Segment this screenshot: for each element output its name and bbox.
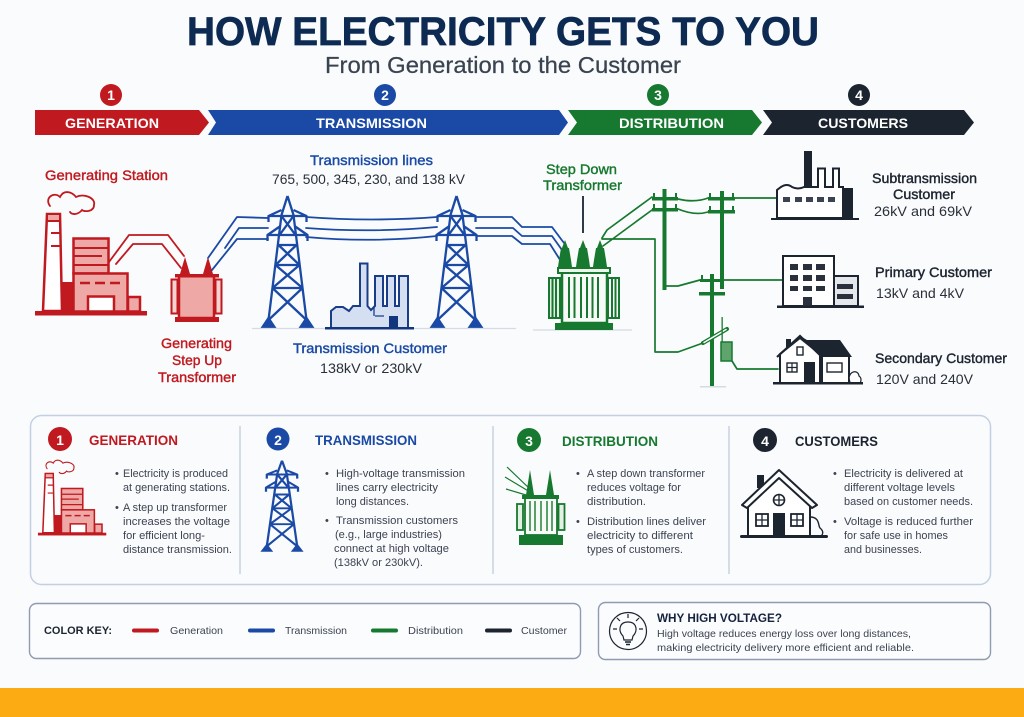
icon: small transformer	[505, 467, 564, 545]
column: customers	[740, 428, 973, 556]
distribution bullets: •	[576, 468, 580, 480]
key: generation: Generation	[170, 625, 223, 637]
step 4 chevron: customers	[763, 84, 974, 135]
column: generation: GENERATION	[89, 432, 178, 448]
label: subtransmission customer: Subtransmission	[872, 170, 977, 186]
distribution bullets: types of customers.	[587, 544, 683, 556]
distribution bullets: electricity to different	[587, 530, 693, 542]
generation bullets: •	[115, 468, 119, 480]
step 4 chevron: customers: CUSTOMERS	[818, 115, 908, 131]
green distribution wires	[602, 197, 783, 369]
icon: small tower	[260, 461, 304, 552]
generation bullets	[115, 468, 232, 556]
label: generating step up transformer	[158, 335, 236, 385]
step 2 chevron: transmission: TRANSMISSION	[316, 115, 427, 131]
icon: small house	[740, 470, 828, 538]
key: distribution: Distribution	[408, 625, 463, 637]
distribution bullets: A step down transformer	[587, 468, 705, 480]
customers bullets: •	[833, 516, 837, 528]
step 2 chevron: transmission: 2	[381, 87, 389, 103]
customers bullets: Electricity is delivered at	[844, 468, 963, 480]
distribution bullets: •	[576, 516, 580, 528]
label: generating step up transformer: Transformer	[158, 369, 236, 385]
generation bullets: for efficient long-	[123, 530, 205, 542]
icon: light bulb	[610, 612, 646, 650]
label: primary customer: 13kV and 4kV	[876, 285, 965, 301]
column: customers: 4	[761, 433, 769, 449]
panel: color key	[30, 604, 580, 658]
label: primary customer	[875, 264, 992, 301]
customers bullets: different voltage levels	[844, 482, 955, 494]
icon: subtransmission customer factory	[771, 151, 859, 220]
transmission bullets: •	[325, 468, 329, 480]
panel: why high voltage: WHY HIGH VOLTAGE?	[657, 613, 782, 625]
panel: why high voltage: making electricity delivery more efficient and reliable.	[657, 642, 914, 654]
label: generating step up transformer: Step Up	[172, 352, 222, 368]
label: transmission lines: Transmission lines	[310, 152, 433, 168]
transmission bullets: connect at high voltage	[334, 543, 449, 555]
process banner	[35, 84, 974, 135]
red wires to step up transformer	[109, 235, 184, 268]
column: distribution: DISTRIBUTION	[562, 433, 658, 449]
transmission bullets: (e.g., large industries)	[335, 529, 442, 541]
icon: utility poles	[652, 189, 735, 388]
icon: transmission tower 2	[430, 196, 484, 328]
transmission bullets: •	[325, 515, 329, 527]
icon: transmission tower 1	[260, 196, 314, 328]
label: transmission lines: 765, 500, 345, 230, and 138 kV	[272, 171, 466, 187]
transmission bullets: long distances.	[336, 496, 409, 508]
column: distribution	[505, 428, 706, 556]
key: transmission: Transmission	[285, 625, 347, 637]
customers bullets: based on customer needs.	[844, 496, 973, 508]
panel: color key: COLOR KEY:	[44, 625, 112, 637]
customers bullets: for safe use in homes	[844, 530, 948, 542]
icon: small factory	[38, 460, 106, 535]
blue transmission wires	[208, 217, 564, 270]
step 4 chevron: customers: 4	[855, 87, 863, 103]
customers bullets: Voltage is reduced further	[844, 516, 973, 528]
generation bullets: Electricity is produced	[123, 468, 228, 480]
label: step down transformer	[543, 161, 622, 193]
generation bullets: increases the voltage	[123, 516, 230, 528]
transmission bullets: (138kV or 230kV).	[334, 557, 423, 569]
ground line	[252, 328, 632, 330]
customers bullets: and businesses.	[844, 544, 922, 556]
icon: primary customer building	[777, 256, 864, 308]
label: generating step up transformer: Generating	[161, 335, 232, 351]
step 2 chevron: transmission	[208, 84, 568, 135]
label: secondary customer: 120V and 240V	[876, 371, 974, 387]
generation bullets: •	[115, 502, 119, 514]
panel: why high voltage	[598, 602, 990, 660]
step 1 chevron: generation: 1	[107, 87, 115, 103]
key: customer: Customer	[521, 625, 568, 637]
transmission bullets: Transmission customers	[336, 515, 459, 527]
column: generation: 1	[56, 432, 64, 448]
label: transmission customer: Transmission Customer	[293, 340, 447, 356]
transmission bullets	[325, 468, 465, 569]
label: step down transformer: Transformer	[543, 177, 622, 193]
step 3 chevron: distribution	[568, 84, 762, 135]
column: transmission: TRANSMISSION	[315, 432, 417, 448]
distribution bullets: distribution.	[587, 496, 646, 508]
step 1 chevron: generation	[35, 84, 209, 135]
column: customers: CUSTOMERS	[795, 433, 878, 449]
key: customer	[485, 625, 568, 637]
label: subtransmission customer: Customer	[893, 186, 955, 202]
customers bullets: •	[833, 468, 837, 480]
title: HOW ELECTRICITY GETS TO YOU	[187, 10, 819, 54]
icon: generating station factory	[35, 192, 147, 316]
customers bullets	[833, 468, 973, 556]
column: transmission	[260, 428, 465, 569]
column: transmission: 2	[274, 432, 282, 448]
label: subtransmission customer	[872, 170, 977, 219]
label: transmission lines	[272, 152, 466, 187]
distribution bullets: Distribution lines deliver	[587, 516, 706, 528]
panel: four-step explanation	[30, 416, 990, 584]
step 3 chevron: distribution: 3	[654, 87, 662, 103]
label: secondary customer	[875, 350, 1007, 387]
icon: secondary customer house	[773, 336, 863, 384]
label: primary customer: Primary Customer	[875, 264, 992, 280]
label: transmission customer: 138kV or 230kV	[320, 360, 423, 376]
label: transmission customer	[293, 340, 447, 376]
subtitle: From Generation to the Customer	[325, 52, 681, 78]
generation bullets: A step up transformer	[123, 502, 227, 514]
distribution bullets: reduces voltage for	[587, 482, 681, 494]
step 1 chevron: generation: GENERATION	[65, 115, 159, 131]
label: secondary customer: Secondary Customer	[875, 350, 1007, 366]
label: subtransmission customer: 26kV and 69kV	[874, 203, 973, 219]
label: step down transformer: Step Down	[546, 161, 617, 177]
column: generation	[38, 427, 232, 556]
column: distribution: 3	[525, 433, 533, 449]
step 3 chevron: distribution: DISTRIBUTION	[619, 115, 724, 131]
transmission bullets: lines carry electricity	[336, 482, 439, 494]
key: transmission	[248, 625, 347, 637]
icon: step down transformer	[549, 240, 619, 330]
callout line	[582, 196, 584, 233]
key: distribution	[371, 625, 463, 637]
label: generating station: Generating Station	[45, 167, 168, 183]
generation bullets: distance transmission.	[123, 544, 232, 556]
icon: step up transformer	[172, 257, 222, 322]
distribution bullets	[576, 468, 706, 556]
key: generation	[132, 625, 223, 637]
footer bar	[0, 688, 1024, 717]
icon: transmission customer factory	[325, 264, 414, 330]
panel: why high voltage: High voltage reduces energy loss over long distances,	[657, 628, 911, 640]
transmission bullets: High-voltage transmission	[336, 468, 465, 480]
generation bullets: at generating stations.	[123, 482, 230, 494]
